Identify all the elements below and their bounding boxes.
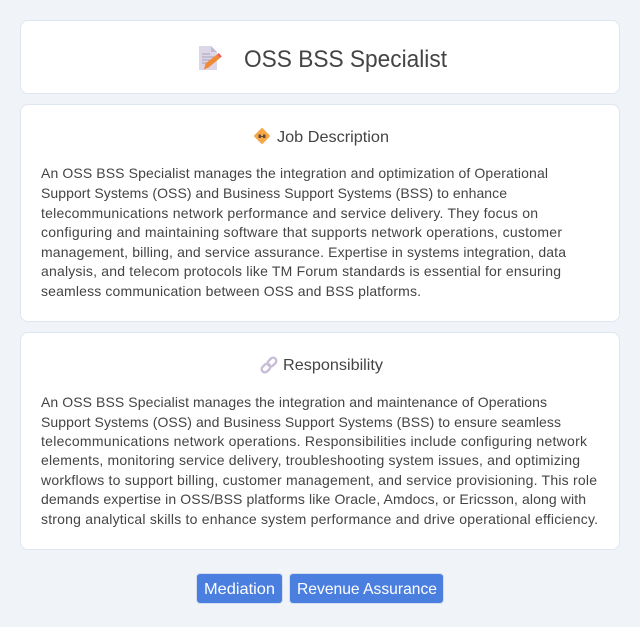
- tag: revenue assurance: [289, 573, 444, 604]
- tag: mediation: Mediation: [204, 581, 275, 598]
- text block: job description: [41, 165, 566, 299]
- text block: job description: analysis, and telecom protocols like TM Forum standards is essential for ensuring: [41, 263, 561, 279]
- text block: job description: configuring and maintaining software that supports network operations, customer: [41, 224, 562, 240]
- panel: responsibility: [20, 332, 620, 550]
- icon: orange diamond: [254, 128, 270, 144]
- text block: responsibility: elements, monitoring service delivery, troubleshooting system issues, and optimizing: [41, 452, 580, 468]
- text block: responsibility: telecommunications network operations. Responsibilities include configuring network: [41, 433, 588, 449]
- text block: responsibility: An OSS BSS Specialist manages the integration and maintenance of Operations: [41, 394, 547, 410]
- text block: job description: Support Systems (OSS) and Business Support Systems (BSS) to enhance: [41, 185, 507, 201]
- heading: job description: Job Description: [277, 129, 389, 146]
- tag: mediation: [196, 573, 283, 604]
- title: OSS BSS Specialist: [244, 46, 447, 73]
- text block: responsibility: Support Systems (OSS) and Business Support Systems (BSS) to ensure seamless: [41, 414, 561, 430]
- text block: responsibility: workflows to support billing, customer management, and service provisioning. This role: [40, 472, 597, 488]
- text block: job description: management, billing, and service assurance. Expertise in systems integration, data: [41, 244, 566, 260]
- icon: document with pencil: [199, 46, 222, 70]
- text block: job description: seamless communication between OSS and BSS platforms.: [41, 283, 421, 299]
- text block: job description: telecommunications network performance and service delivery. They focus on: [41, 205, 538, 221]
- text block: responsibility: strong analytical skills to enhance system performance and drive operational efficiency.: [41, 511, 598, 527]
- panel: title card: [20, 20, 620, 94]
- text block: job description: An OSS BSS Specialist manages the integration and optimization of Operational: [41, 165, 548, 181]
- heading: responsibility: Responsibility: [283, 357, 383, 374]
- text block: responsibility: demands expertise in OSS/BSS platforms like Oracle, Amdocs, or Ericsson, along with: [41, 491, 586, 507]
- panel: job description: [20, 104, 620, 322]
- tag: revenue assurance: Revenue Assurance: [297, 581, 437, 598]
- icon: chain link: [260, 356, 278, 374]
